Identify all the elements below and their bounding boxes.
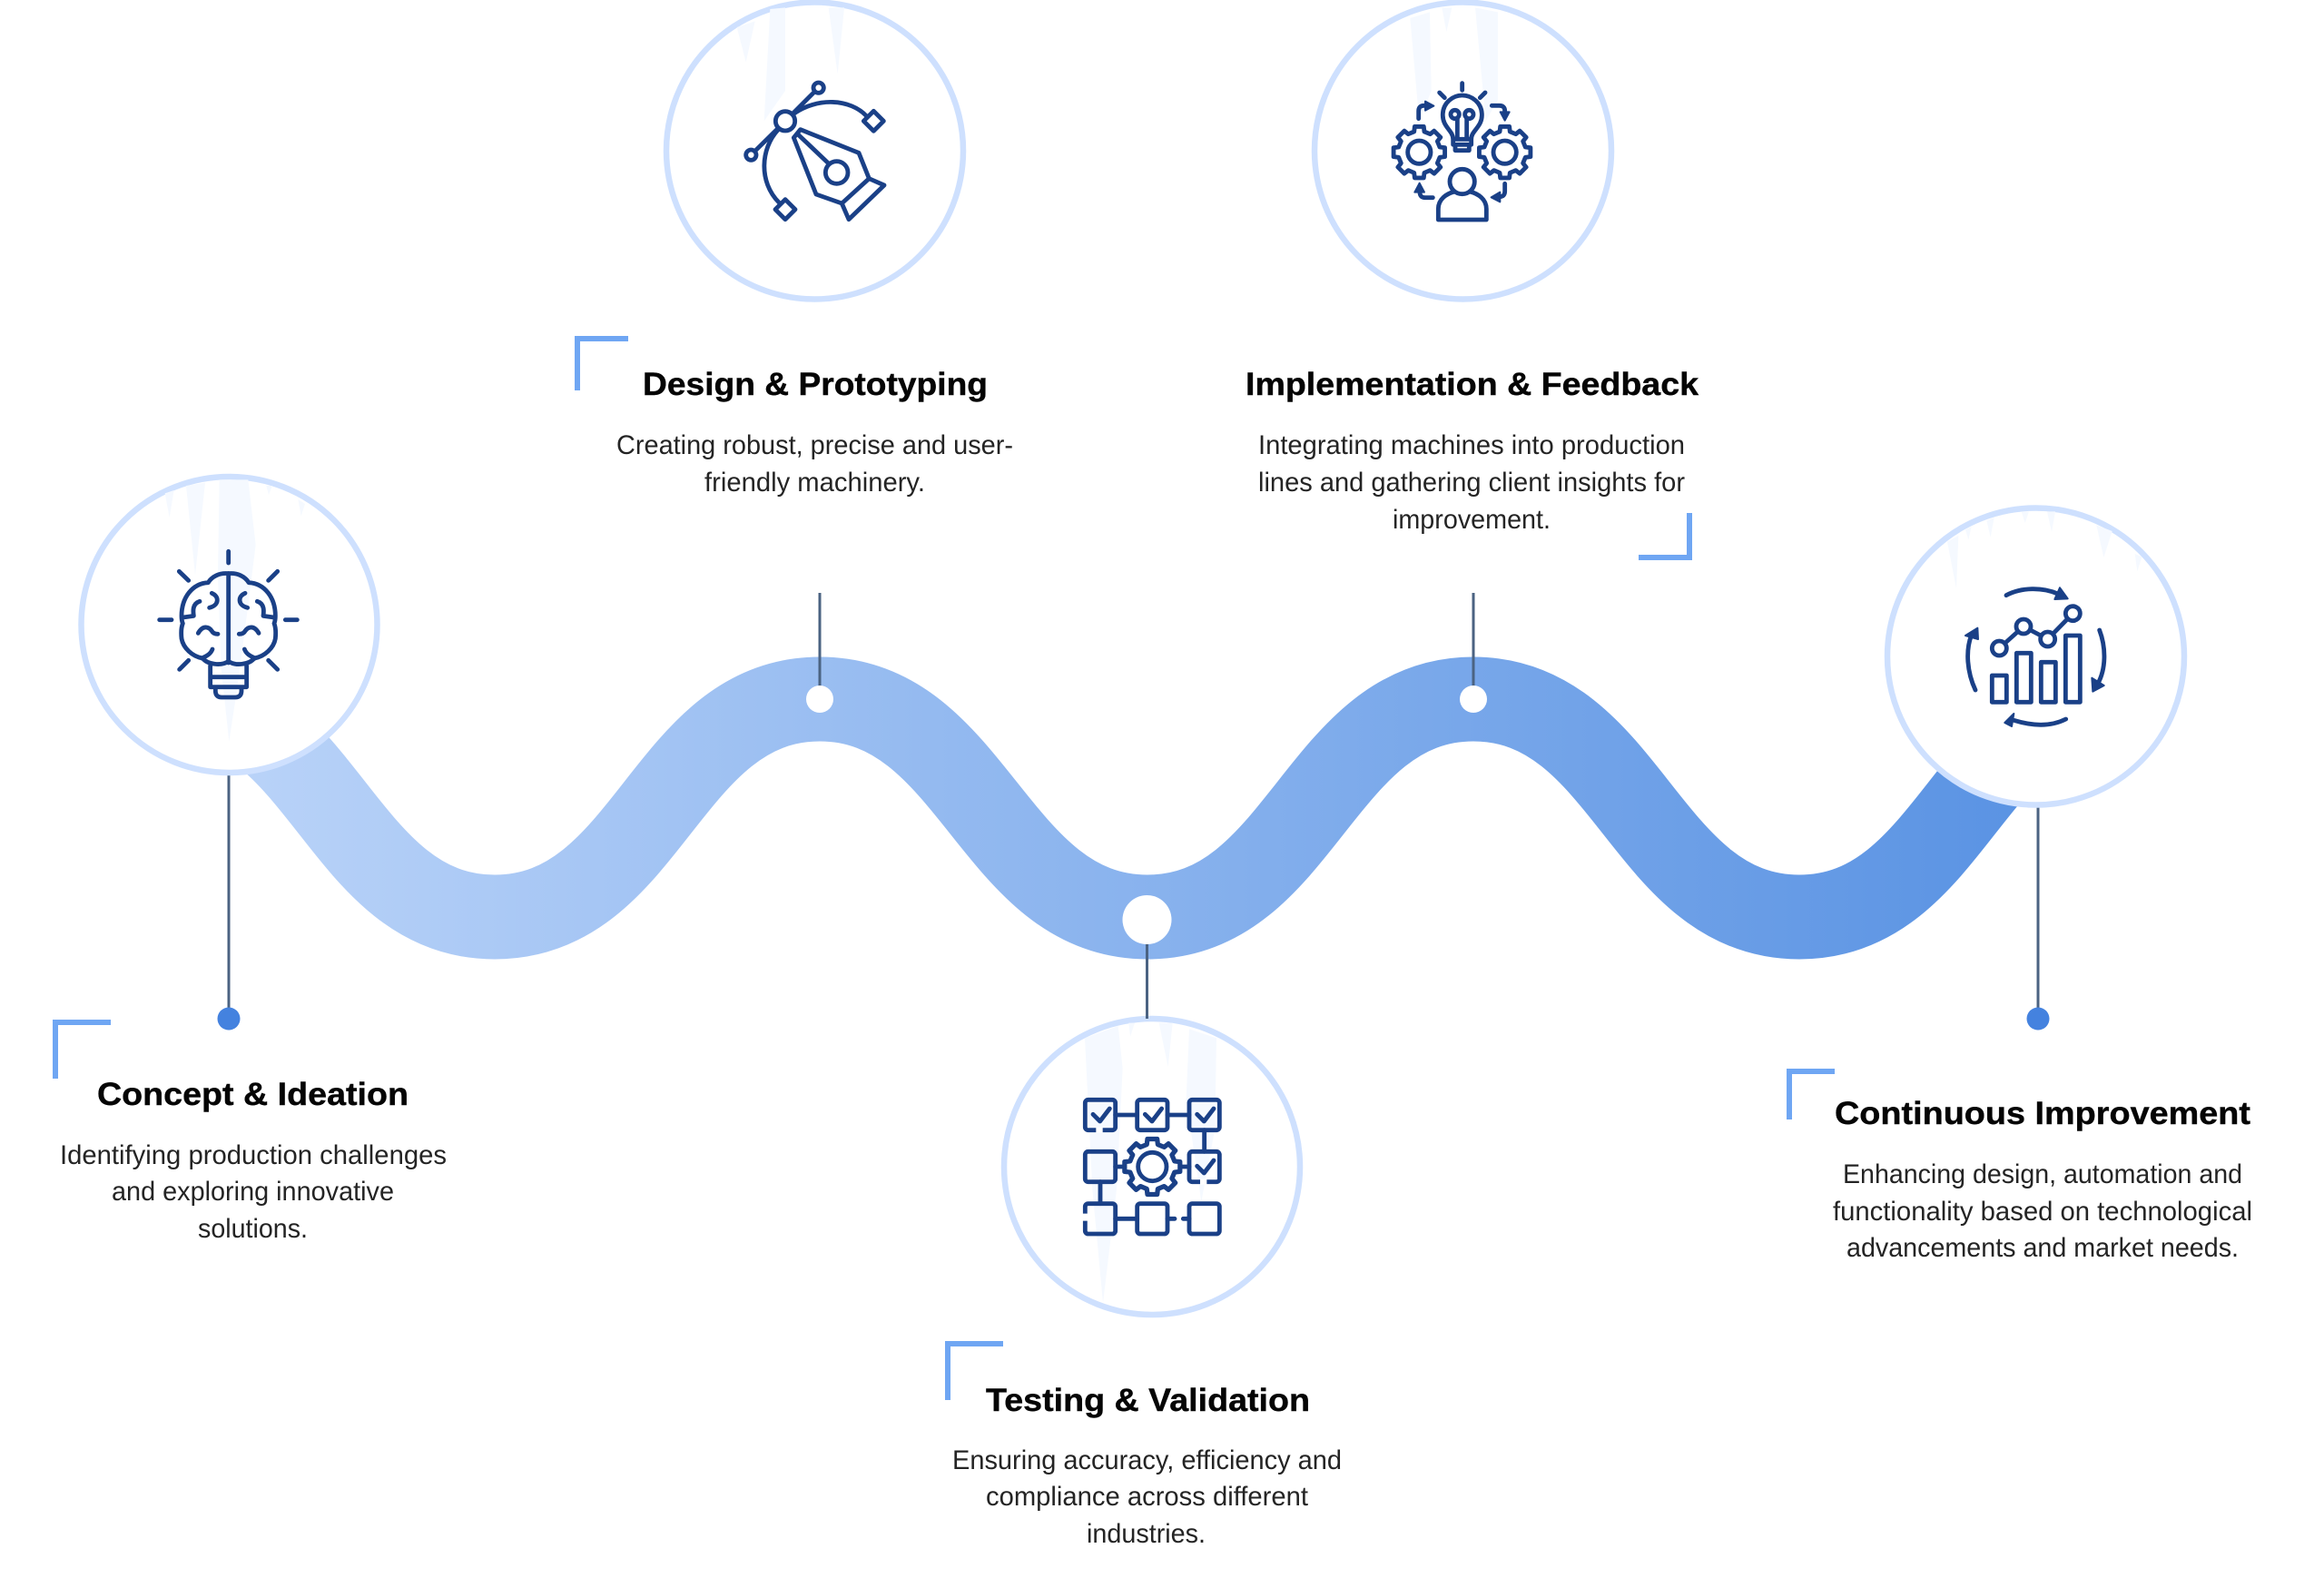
panel: Implementation & Feedback (1246, 2, 1699, 713)
panel: Continuous Improvement (1789, 508, 2252, 1263)
heading: Continuous Improvement (1835, 1096, 2250, 1131)
description: compliance across different (986, 1482, 1309, 1512)
description: friendly machinery. (704, 468, 925, 498)
heading: Concept & Ideation (97, 1077, 409, 1112)
description (1833, 1159, 2252, 1263)
panel: Design & Prototyping (577, 2, 1013, 713)
icon: ideas, gears and person cycle (1393, 7, 1531, 220)
description: lines and gathering client insights for (1258, 468, 1685, 498)
connector line and wave dot (1460, 593, 1487, 713)
icon circle (666, 2, 963, 300)
description (616, 430, 1013, 498)
description (1258, 430, 1685, 535)
description: Identifying production challenges (60, 1140, 447, 1170)
description: advancements and market needs. (1846, 1233, 2239, 1263)
icon circle (82, 477, 378, 773)
icon: pen tool (737, 7, 884, 220)
panel: Concept & Ideation (55, 477, 447, 1244)
panel: Testing & Validation (948, 895, 1342, 1549)
corner bracket (577, 339, 628, 390)
description: solutions. (198, 1214, 308, 1244)
corner bracket (1789, 1071, 1835, 1119)
description: Ensuring accuracy, efficiency and (952, 1445, 1342, 1475)
corner bracket (1639, 513, 1689, 557)
description: Creating robust, precise and user- (616, 430, 1013, 460)
description: Integrating machines into production (1258, 430, 1685, 460)
icon circle (1004, 1019, 1300, 1315)
icon: growth chart with cycle arrows (1947, 511, 2142, 726)
icon circle (1315, 2, 1611, 300)
wave ribbon (170, 699, 2124, 917)
corner bracket (55, 1022, 111, 1079)
description: Enhancing design, automation and (1843, 1159, 2242, 1189)
heading: Design & Prototyping (643, 367, 988, 402)
corner bracket (948, 1344, 1003, 1400)
connector line and end dot (218, 772, 240, 1030)
heading: Implementation & Feedback (1246, 367, 1699, 402)
description: functionality based on technological (1833, 1197, 2252, 1227)
connector line and end dot (2026, 804, 2050, 1030)
connector line and wave dot (806, 593, 833, 713)
description (60, 1140, 447, 1244)
description: and exploring innovative (112, 1177, 394, 1207)
description (952, 1445, 1342, 1549)
icon: brain light bulb (160, 479, 305, 742)
icon circle (1887, 508, 2184, 804)
description: improvement. (1393, 505, 1551, 535)
connector line and wave dot (1122, 895, 1171, 1019)
description: industries. (1087, 1519, 1206, 1549)
icon: process checklist with gear (1082, 1023, 1219, 1303)
heading: Testing & Validation (986, 1383, 1310, 1418)
